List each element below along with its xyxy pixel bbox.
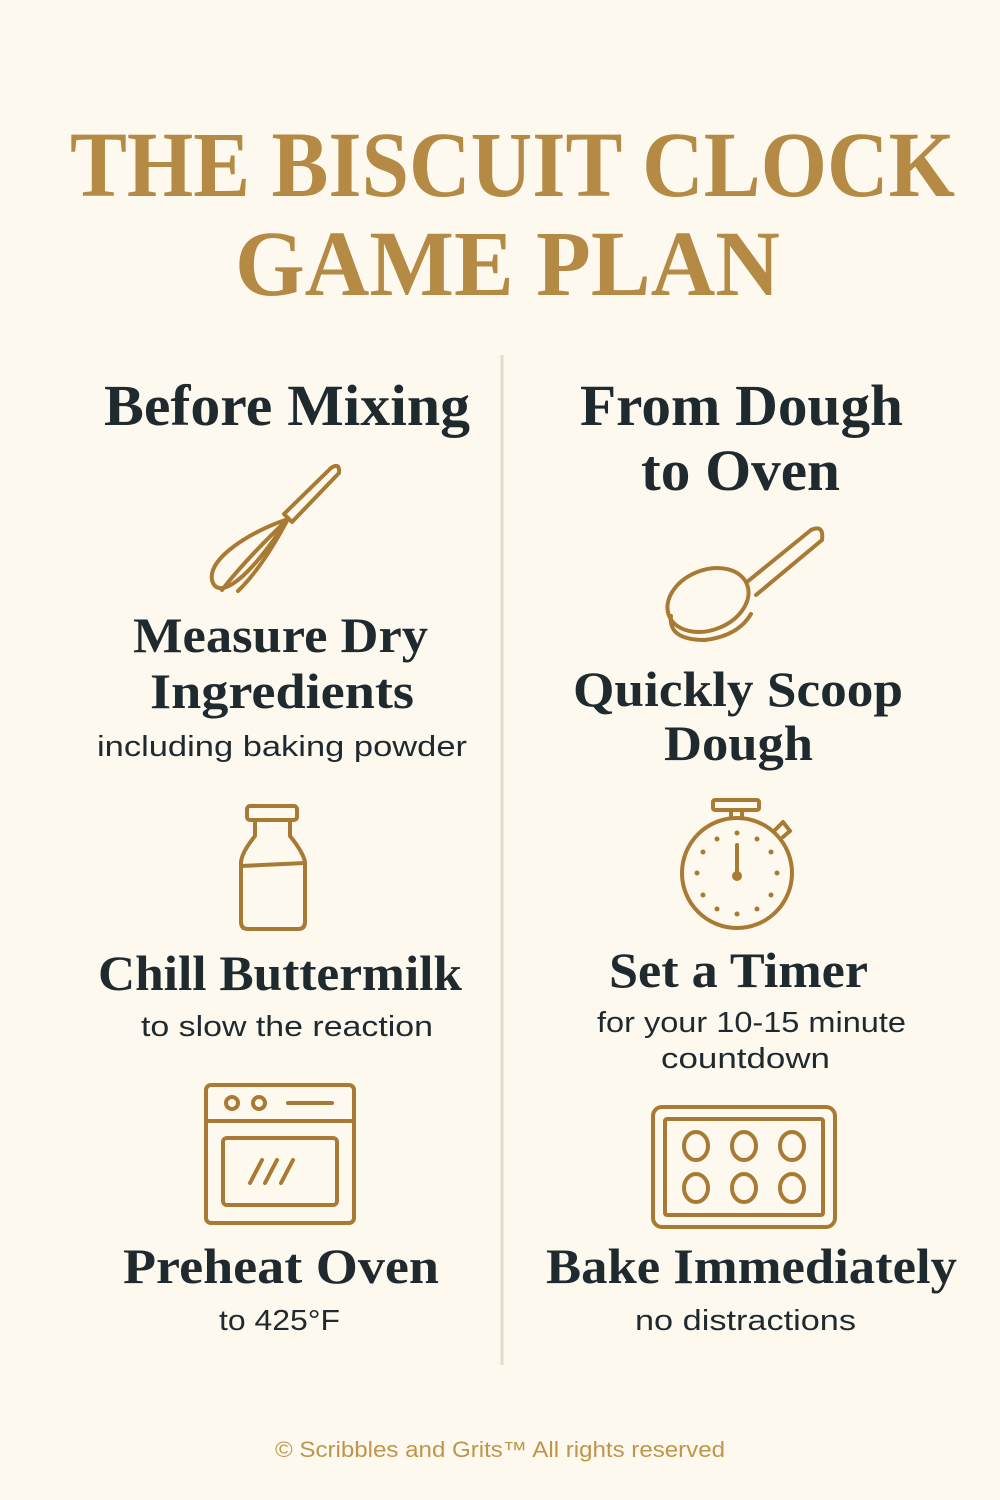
footer: © Scribbles and Grits™ All rights reserved <box>275 1437 725 1462</box>
step: set a timer <box>597 942 906 1075</box>
step: quickly scoop dough: Quickly Scoop <box>573 661 903 717</box>
step: set a timer: countdown <box>661 1043 830 1075</box>
step: measure dry ingredients: including baking powder <box>97 731 467 763</box>
step: quickly scoop dough: Dough <box>664 715 813 771</box>
icon: oven <box>206 1085 354 1223</box>
icon: buttermilk bottle <box>241 806 305 929</box>
step: set a timer: for your 10-15 minute <box>597 1007 906 1039</box>
step: chill buttermilk: to slow the reaction <box>141 1011 433 1043</box>
heading: from dough to oven <box>580 373 903 503</box>
step: quickly scoop dough <box>573 661 903 771</box>
icon: baking tray <box>653 1107 835 1227</box>
step: chill buttermilk <box>98 945 462 1043</box>
step: bake immediately <box>546 1238 957 1337</box>
step: chill buttermilk: Chill Buttermilk <box>98 945 462 1001</box>
step: bake immediately: no distractions <box>635 1305 856 1337</box>
title: GAME PLAN <box>235 213 780 316</box>
step: bake immediately: Bake Immediately <box>546 1238 957 1294</box>
icon: scoop <box>658 528 822 644</box>
step: measure dry ingredients <box>97 607 467 763</box>
step: measure dry ingredients: Ingredients <box>150 663 414 719</box>
heading: from dough to oven: From Dough <box>580 373 903 438</box>
step: measure dry ingredients: Measure Dry <box>133 607 428 663</box>
icon: whisk <box>212 466 339 591</box>
panel: from dough to oven <box>546 373 957 1337</box>
heading: from dough to oven: to Oven <box>641 438 840 503</box>
heading: before mixing: Before Mixing <box>104 373 470 438</box>
panel: before mixing <box>97 373 470 1337</box>
title <box>70 114 955 316</box>
step: set a timer: Set a Timer <box>609 942 868 998</box>
step: preheat oven <box>123 1238 439 1337</box>
step: preheat oven: Preheat Oven <box>123 1238 439 1294</box>
step: preheat oven: to 425°F <box>219 1305 340 1337</box>
icon: stopwatch <box>682 800 792 928</box>
